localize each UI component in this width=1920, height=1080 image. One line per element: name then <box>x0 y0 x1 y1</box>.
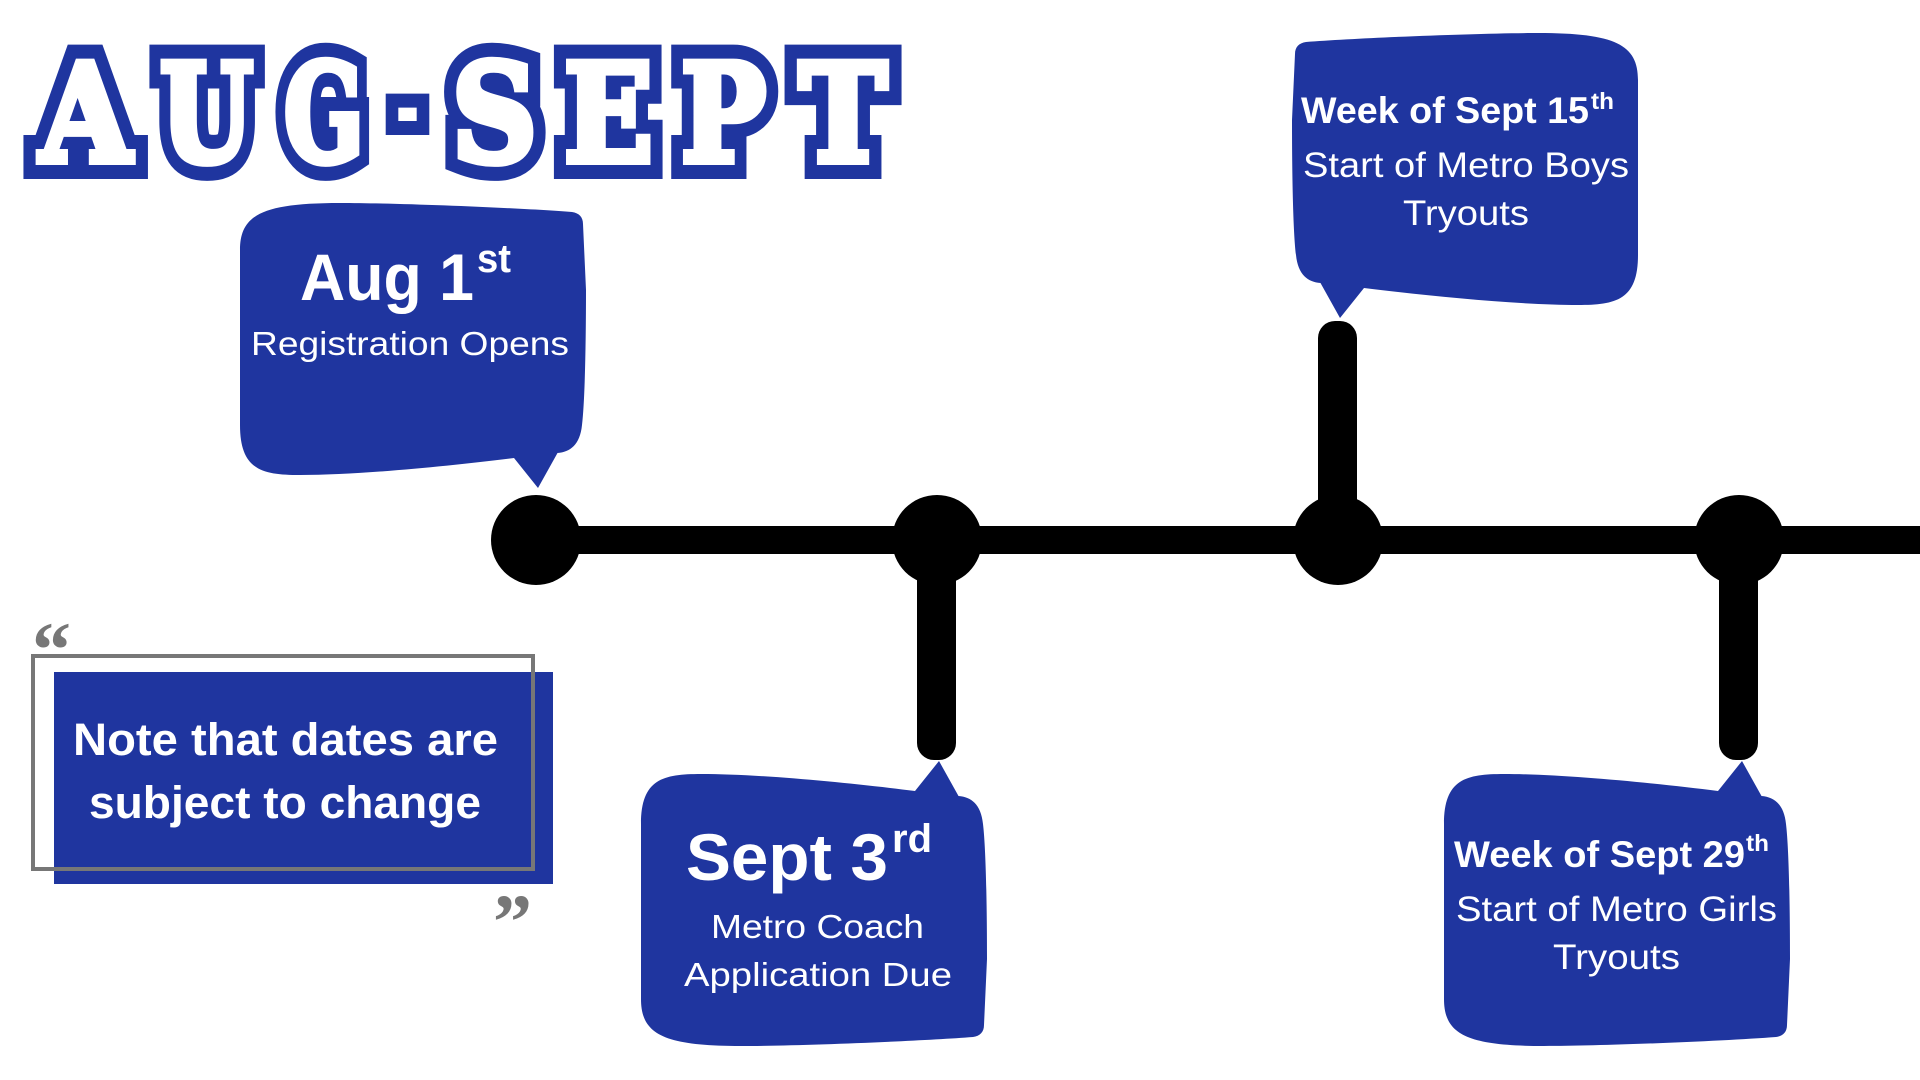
title: U <box>160 34 253 193</box>
title: E <box>564 34 653 193</box>
callout: Week of Sept 29th: Tryouts <box>1553 938 1680 977</box>
horizontal line <box>536 526 1920 554</box>
marker: Aug 1st <box>491 495 581 585</box>
timeline <box>491 321 1920 760</box>
note frame <box>33 656 533 869</box>
title: A <box>38 34 133 193</box>
title: T <box>799 34 887 193</box>
note background <box>54 672 553 884</box>
stem: Week of Sept 29th <box>1719 540 1758 760</box>
callout: Week of Sept 29th: Week of Sept 29 <box>1454 834 1745 875</box>
callout: Week of Sept 15th: Tryouts <box>1403 194 1529 233</box>
marker: Week of Sept 15th <box>1293 495 1383 585</box>
marker: Sept 3rd <box>892 495 982 585</box>
callout: Sept 3rd: Application Due <box>684 956 952 993</box>
callout: Sept 3rd: rd <box>892 817 932 861</box>
callout: Week of Sept 15th: Start of Metro Boys <box>1303 146 1629 185</box>
callout: Week of Sept 15th: th <box>1591 88 1614 114</box>
title <box>38 34 887 193</box>
callout: Sept 3rd: Metro Coach <box>711 908 924 945</box>
callout: Week of Sept 15th: Week of Sept 15 <box>1301 90 1589 131</box>
callout: Week of Sept 15th <box>1292 33 1638 318</box>
title: - <box>400 88 415 135</box>
note text: Note that dates are <box>73 714 498 765</box>
callout: Week of Sept 29th: th <box>1746 830 1769 856</box>
closing quote mark: ” <box>493 878 532 965</box>
marker: Week of Sept 29th <box>1694 495 1784 585</box>
callout: Sept 3rd <box>641 761 987 1046</box>
callout: Aug 1st: st <box>477 237 511 281</box>
title: P <box>681 34 766 193</box>
note text <box>73 714 498 828</box>
callout: Aug 1st: Aug 1 <box>300 240 474 314</box>
title: S <box>452 34 537 193</box>
note box <box>32 606 553 965</box>
callout: Week of Sept 29th <box>1444 761 1790 1046</box>
callout: Week of Sept 29th: Start of Metro Girls <box>1456 890 1777 929</box>
stem: Sept 3rd <box>917 540 956 760</box>
title: G <box>284 34 364 193</box>
stem: Week of Sept 15th <box>1318 321 1357 540</box>
note text: subject to change <box>89 777 481 828</box>
opening quote mark: “ <box>32 606 71 693</box>
callout: Aug 1st <box>240 203 586 488</box>
callout: Aug 1st: Registration Opens <box>251 325 569 362</box>
callout: Sept 3rd: Sept 3 <box>686 820 888 894</box>
